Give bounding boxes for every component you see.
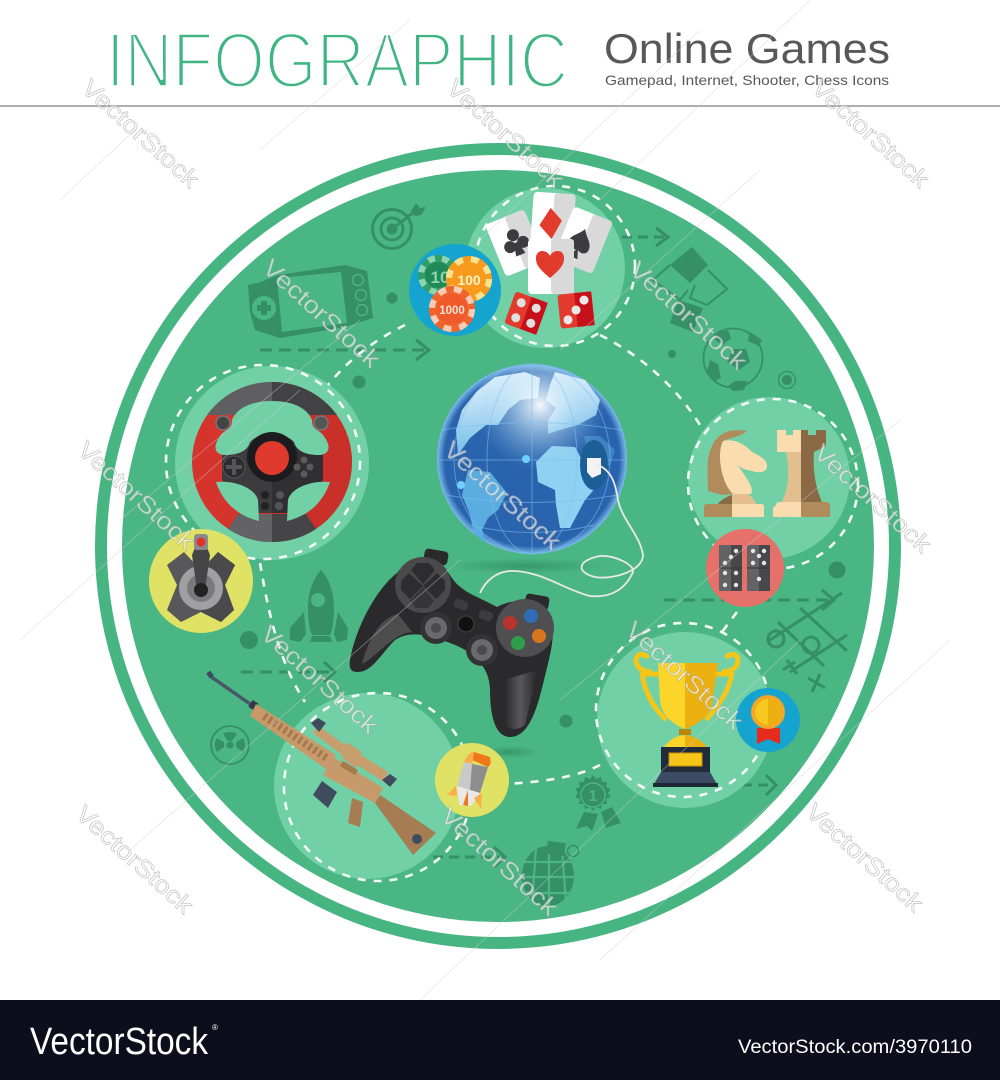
cards panel <box>485 192 613 335</box>
joystick icon <box>149 529 253 633</box>
card: diamond <box>530 192 576 250</box>
socket <box>580 440 608 490</box>
card: club <box>485 209 545 277</box>
icon: rocket <box>290 570 348 642</box>
watermark labels: VectorStock <box>441 74 570 194</box>
icon: grenade <box>521 841 578 906</box>
watermark labels: VectorStock <box>624 256 753 376</box>
icon: ribbon badge: 1 <box>589 788 598 805</box>
medal icon <box>736 688 800 752</box>
rifle <box>208 673 436 855</box>
heading: Online Games: Online Games <box>604 25 890 72</box>
continents <box>456 372 540 455</box>
icon: soccer ball <box>704 328 762 391</box>
background icons <box>211 203 847 906</box>
watermark labels: VectorStock <box>438 436 567 556</box>
watermark labels: VectorStock <box>800 798 929 918</box>
icon: small ball <box>778 372 796 388</box>
knight <box>704 430 767 517</box>
icon: ribbon badge <box>575 775 621 831</box>
watermark labels: VectorStock <box>72 436 201 556</box>
watermark labels: VectorStock <box>808 439 937 559</box>
chip 10: 10 <box>431 268 449 287</box>
trophy <box>636 654 738 787</box>
watermark labels: VectorStock <box>255 620 384 740</box>
watermark labels <box>70 74 937 922</box>
card: heart <box>528 239 574 294</box>
dice: three <box>557 291 595 329</box>
footer bar: ® <box>212 1023 218 1032</box>
icon: radiation <box>211 726 249 764</box>
footer bar: VectorStock <box>30 1021 209 1063</box>
chip 100: 100 <box>457 272 481 288</box>
dashed arrows <box>241 228 834 867</box>
dots <box>352 376 366 388</box>
rook <box>773 430 830 517</box>
icon: bullets <box>370 712 421 748</box>
watermark labels: VectorStock <box>70 800 199 920</box>
header title: INFOGRAPHIC: INFOGRAPHIC <box>106 16 568 104</box>
globe <box>437 364 627 574</box>
chess panel <box>704 430 830 517</box>
dominoes icon <box>706 529 784 607</box>
gamepad <box>350 548 554 758</box>
watermark labels: VectorStock <box>806 74 935 194</box>
cable <box>480 465 643 596</box>
icon: target <box>372 203 426 248</box>
dashed connectors <box>166 186 858 881</box>
dice: four <box>504 291 548 335</box>
main circle panel <box>95 143 901 949</box>
icon: tic tac toe <box>767 593 847 692</box>
footer bar: VectorStock.com/3970110 <box>738 1037 972 1058</box>
card: spade <box>553 206 613 274</box>
icon: handheld console <box>248 265 373 338</box>
face buttons <box>496 599 554 657</box>
chip 1000: 1000 <box>439 305 465 317</box>
watermark labels: VectorStock <box>620 616 749 736</box>
chips icon <box>409 244 501 336</box>
icon: puzzle <box>653 247 727 332</box>
subtitle: Gamepad, Internet, Shooter, Chess Icons <box>605 72 889 88</box>
rocket icon <box>435 743 509 817</box>
cutouts <box>215 401 329 455</box>
footer bar <box>0 1000 1000 1080</box>
watermark labels: VectorStock <box>257 254 386 374</box>
steering wheel <box>192 382 352 542</box>
watermark labels: VectorStock <box>76 74 205 194</box>
analog sticks <box>420 612 452 644</box>
panel circles <box>175 188 850 879</box>
d-pad <box>395 557 451 613</box>
watermark labels: VectorStock <box>435 802 564 922</box>
